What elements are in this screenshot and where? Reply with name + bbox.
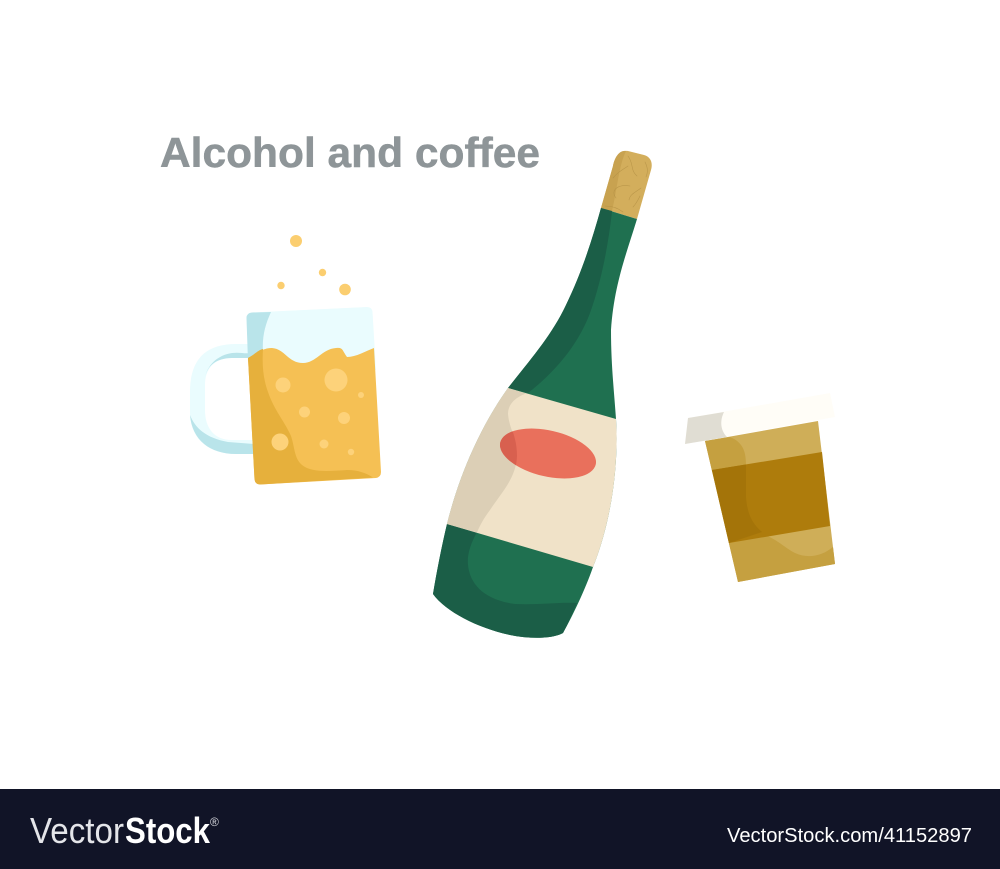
icon: champagne bottle bbox=[433, 151, 652, 638]
icon: coffee cup bbox=[685, 393, 835, 582]
mug handle bbox=[190, 344, 254, 454]
cup body shadow bbox=[705, 437, 835, 582]
bottle cork bbox=[601, 151, 652, 219]
rising bubbles bbox=[277, 235, 351, 295]
beer bubbles bbox=[272, 368, 364, 455]
footer logo: ® bbox=[210, 815, 219, 829]
title: Alcohol and coffee bbox=[160, 129, 540, 176]
mug glass and foam bbox=[246, 307, 376, 370]
footer logo: Vector bbox=[30, 810, 124, 851]
label oval bbox=[495, 420, 601, 487]
cup sleeve bbox=[712, 452, 830, 543]
bottle shadow bbox=[433, 208, 612, 638]
cup body bbox=[705, 421, 835, 582]
cup lid bbox=[685, 393, 835, 444]
bottle glass bbox=[433, 208, 637, 638]
bottle label bbox=[447, 388, 617, 567]
footer logo bbox=[30, 810, 219, 851]
footer bar bbox=[0, 789, 1000, 869]
footer logo: Stock bbox=[125, 810, 211, 851]
footer image id: VectorStock.com/41152897 bbox=[727, 825, 972, 847]
beer liquid bbox=[248, 348, 381, 484]
label oval shadow bbox=[500, 431, 517, 466]
icon: beer mug bbox=[190, 235, 381, 484]
